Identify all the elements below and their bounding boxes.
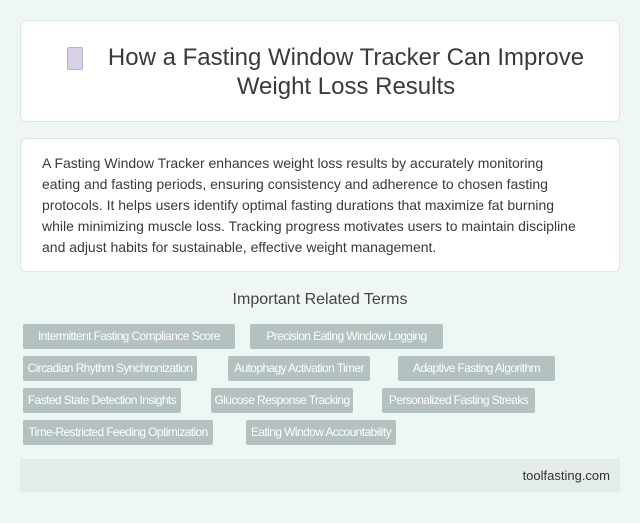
description panel (20, 138, 620, 272)
tags: Adaptive Fasting Algorithm (413, 361, 540, 375)
tags: Intermittent Fasting Compliance Score (38, 329, 220, 343)
header panel (20, 20, 620, 122)
tags: Personalized Fasting Streaks (389, 393, 528, 407)
section heading: Important Related Terms (233, 291, 407, 308)
footer (20, 459, 620, 492)
tags: Circadian Rhythm Synchronization (28, 361, 192, 375)
tags: Fasted State Detection Insights (28, 393, 176, 407)
tags: Glucose Response Tracking (214, 393, 350, 407)
title: How a Fasting Window Tracker Can Improve Weight Loss Results (108, 44, 584, 100)
icon: document (67, 47, 83, 70)
footer text: toolfasting.com (523, 468, 610, 483)
description text: A Fasting Window Tracker enhances weight loss results by accurately monitoring eating and fasting periods, ensuring consistency and adherence to chosen fasting protocols. It helps users identify optimal fasting durations that maximize fat burning while minimizing muscle loss. Tracking progress motivates users to maintain discipline and adjust habits for sustainable, effective weight management. (42, 155, 576, 255)
tags: Precision Eating Window Logging (266, 329, 427, 343)
tags: Time-Restricted Feeding Optimization (28, 425, 208, 439)
tags: Autophagy Activation Timer (234, 361, 364, 375)
tags: Eating Window Accountability (251, 425, 391, 439)
